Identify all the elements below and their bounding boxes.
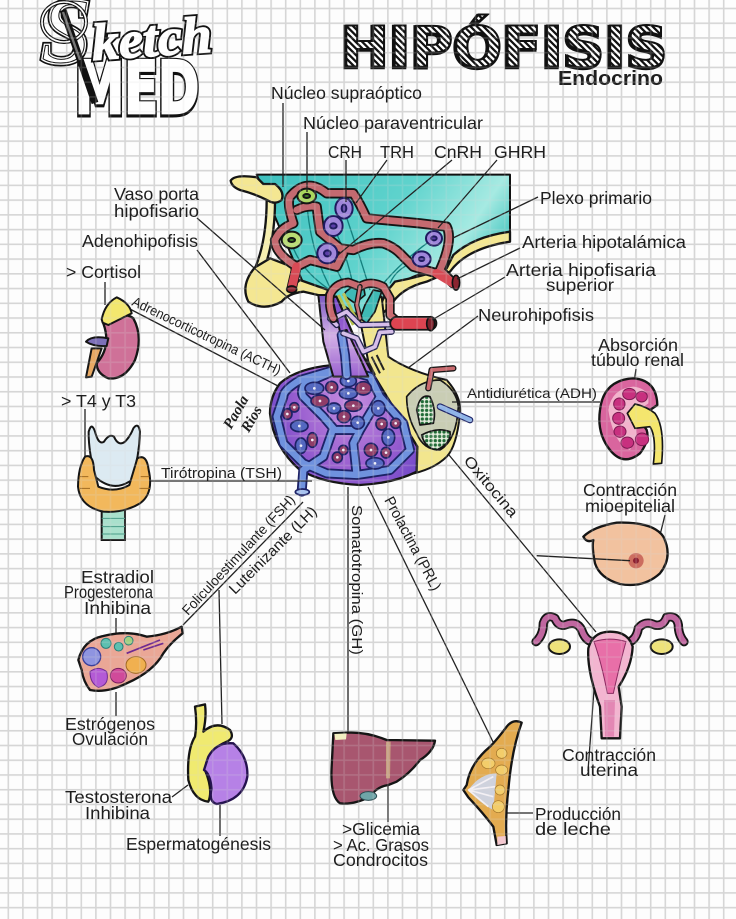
organ: kidney right xyxy=(599,378,662,464)
label: Arteria hipofisaria superior: Arteria hipofisaria xyxy=(506,260,656,280)
label: ADH: Antidiurética (ADH) xyxy=(467,385,597,401)
infundibulum xyxy=(318,295,368,377)
logo: SketchMED: ketch xyxy=(90,7,214,72)
label: Contracción mioepitelial: Contracción xyxy=(583,480,677,500)
anterior lobe xyxy=(270,297,417,485)
labels: releasing hormones: GHRH xyxy=(494,142,546,162)
organ: liver xyxy=(331,733,435,804)
label: Producción de leche: de leche xyxy=(535,819,611,839)
label: Núcleo paraventricular: Núcleo paraventricular xyxy=(303,113,483,133)
label: Estrógenos Ovulación: Estrógenos xyxy=(65,714,155,734)
leader lines xyxy=(85,103,665,836)
organ: thyroid and trachea xyxy=(78,426,150,540)
label: TSH: Tirótropina (TSH) xyxy=(161,465,282,482)
label: Absorción túbulo renal xyxy=(591,335,684,370)
organ: ovary xyxy=(78,627,183,691)
axon fibres xyxy=(292,200,434,293)
signature: Paola xyxy=(221,393,253,432)
yellow fibres xyxy=(338,293,358,325)
subtitle: Endocrino: Endocrino xyxy=(558,68,663,90)
purple neurons xyxy=(317,198,442,267)
yellow bands xyxy=(231,176,510,323)
artery opening xyxy=(427,317,435,331)
organ: testis xyxy=(188,704,247,804)
logo: SketchMED xyxy=(42,0,214,131)
label: Contracción uterina xyxy=(562,745,656,780)
label: PRL: Prolactina (PRL) xyxy=(380,494,444,594)
portal vein xyxy=(342,335,347,375)
labels: releasing hormones xyxy=(328,142,546,162)
pituitary stalk with portal loops xyxy=(318,282,435,377)
red cells xyxy=(283,381,401,463)
fine lilac vessels xyxy=(330,312,393,352)
organ: uterus xyxy=(536,617,684,738)
label: Contracción mioepitelial: mioepitelial xyxy=(585,496,675,516)
labels: releasing hormones: CRH xyxy=(328,142,362,162)
cell nuclei xyxy=(286,380,397,465)
label: Neurohipofisis: Neurohipofisis xyxy=(478,305,594,325)
label: Absorción túbulo renal: túbulo renal xyxy=(591,350,684,370)
teal tissue xyxy=(257,175,510,323)
label: Estradiol Progesterona Inhibina: Progesterona xyxy=(64,582,153,602)
label: LH: Luteinizante (LH) xyxy=(226,503,321,598)
logo: SketchMED: ketch xyxy=(90,7,214,72)
label: Contracción uterina: uterina xyxy=(580,760,638,780)
label: Glicemia Ac. Grasos Condrocitos: >Glicemia xyxy=(342,819,420,839)
label: GH: Somatotropina (GH) xyxy=(348,505,365,655)
label: Producción de leche: Producción xyxy=(535,804,621,824)
label: Producción de leche xyxy=(535,804,621,839)
label: Vaso porta hipofisario: Vaso porta xyxy=(114,184,199,204)
label: Testosterona Inhibina: Inhibina xyxy=(85,803,150,823)
label: Vaso porta hipofisario: hipofisario xyxy=(114,201,199,221)
label: T4 y T3: > T4 y T3 xyxy=(61,391,136,411)
label: Estrógenos Ovulación xyxy=(65,714,155,749)
capillary plexus xyxy=(275,186,453,288)
organ: adrenal and kidney xyxy=(86,297,139,378)
label: FSH: Foliculoestimulante (FSH) xyxy=(178,492,298,618)
label: ACTH: Adrenocorticotropina (ACTH) xyxy=(130,293,284,378)
label: Adenohipofisis: Adenohipofisis xyxy=(82,231,198,251)
green neurons xyxy=(282,189,316,248)
teal pockets xyxy=(343,285,382,323)
hypothalamus section with primary plexus xyxy=(231,175,510,323)
label: Absorción túbulo renal: Absorción xyxy=(598,335,678,355)
label: Arteria hipofisaria superior: superior xyxy=(546,275,614,295)
label: Contracción uterina: Contracción xyxy=(562,745,656,765)
posterior lobe cluster xyxy=(407,380,458,450)
signature: Rios xyxy=(238,403,266,436)
label: Plexo primario: Plexo primario xyxy=(540,188,652,208)
posterior lobe xyxy=(360,297,460,475)
label: Núcleo supraóptico: Núcleo supraóptico xyxy=(271,83,422,103)
label: Oxitocina: Oxitocina xyxy=(460,453,522,522)
signature xyxy=(221,393,267,440)
neurohypophysis vessels xyxy=(428,368,470,420)
labels: releasing hormones: TRH xyxy=(380,142,414,162)
label: Contracción mioepitelial xyxy=(583,480,677,516)
striped capillaries xyxy=(367,355,384,375)
organ: breast (myoepithelial) xyxy=(537,523,668,585)
label: Glicemia Ac. Grasos Condrocitos: > Ac. Grasos xyxy=(333,835,429,855)
organ: mammary gland xyxy=(463,721,522,845)
portal vessels xyxy=(277,350,410,492)
logo: SketchMED: MED xyxy=(75,47,199,131)
title: HIPÓFISIS: HIPÓFISIS xyxy=(340,16,667,82)
label: Arteria hipofisaria superior xyxy=(506,260,656,295)
label: Glicemia Ac. Grasos Condrocitos: Condrocitos xyxy=(333,850,428,870)
labels: releasing hormones: CnRH xyxy=(434,142,482,162)
blue cells xyxy=(291,375,395,469)
label: Estradiol Progesterona Inhibina: Estradiol xyxy=(81,567,154,587)
pituitary gland xyxy=(270,297,470,495)
label: Vaso porta hipofisario xyxy=(114,184,199,221)
label: Testosterona Inhibina: Testosterona xyxy=(65,787,172,807)
logo: SketchMED: MED xyxy=(75,46,199,130)
label: Testosterona Inhibina xyxy=(65,787,172,823)
label: Glicemia Ac. Grasos Condrocitos xyxy=(333,819,429,870)
label: Arteria hipotalámica: Arteria hipotalámica xyxy=(522,232,686,252)
label: Cortisol: > Cortisol xyxy=(66,262,141,282)
red loops xyxy=(330,282,430,323)
label: Estradiol Progesterona Inhibina xyxy=(64,567,154,618)
label: Estradiol Progesterona Inhibina: Inhibina xyxy=(84,598,151,618)
label: Espermatogénesis: Espermatogénesis xyxy=(126,834,271,854)
title: HIPÓFISIS: HIPÓFISIS xyxy=(341,16,668,80)
label: Estrógenos Ovulación: Ovulación xyxy=(72,729,148,749)
